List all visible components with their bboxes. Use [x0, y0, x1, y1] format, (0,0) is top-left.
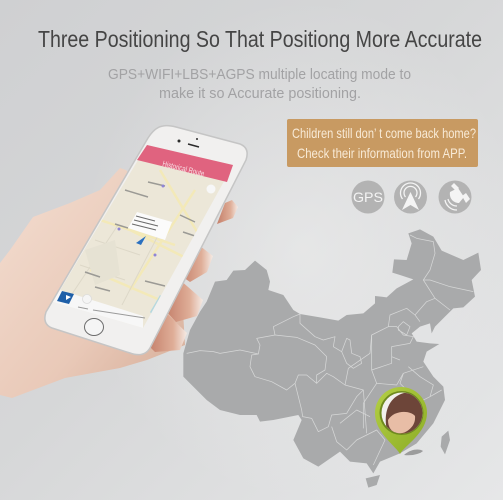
map pin with child photo	[375, 387, 427, 455]
location popup	[128, 212, 172, 240]
child photo	[381, 392, 423, 434]
icon: GPS: GPS	[353, 189, 383, 205]
icon: signal tower	[394, 180, 427, 214]
icon: satellite	[438, 180, 472, 214]
map camera button	[206, 184, 216, 194]
home button	[84, 318, 104, 336]
map details	[72, 170, 198, 314]
callout: Check their information from APP.	[297, 145, 467, 161]
hand holding phone	[0, 126, 247, 398]
speaker and camera	[178, 138, 199, 147]
hand palm and arm	[0, 168, 185, 398]
phone screen map	[53, 145, 233, 328]
map landmass	[183, 229, 481, 473]
China map	[183, 229, 481, 488]
islands	[366, 431, 450, 488]
callout	[287, 119, 478, 167]
phone header	[137, 145, 233, 182]
phone body	[45, 126, 247, 355]
location marker	[136, 236, 146, 245]
province borders	[187, 235, 473, 465]
subtitle: GPS+WIFI+LBS+AGPS multiple locating mode to	[108, 66, 411, 83]
fingers	[148, 200, 238, 352]
subtitle: make it so Accurate positioning.	[159, 85, 361, 102]
subtitle	[108, 66, 411, 102]
screen title: Historical Route	[162, 159, 206, 178]
play panel	[53, 290, 145, 328]
icon: GPS	[352, 180, 384, 214]
